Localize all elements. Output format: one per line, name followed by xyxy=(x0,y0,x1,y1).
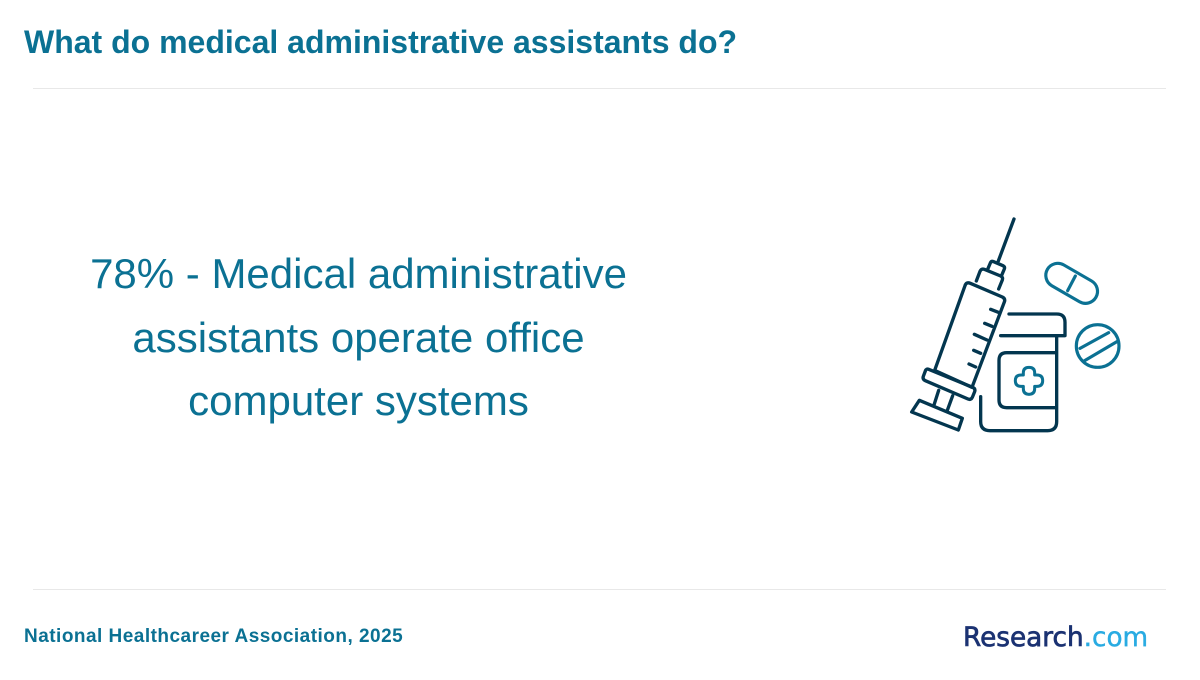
main statistic text: computer systems xyxy=(188,377,529,424)
main statistic text: assistants operate office xyxy=(132,314,585,360)
title: What do medical administrative assistants do? xyxy=(24,24,737,60)
icon: round pill xyxy=(1076,325,1119,367)
main statistic text xyxy=(90,250,627,424)
icon: capsule xyxy=(1041,259,1102,308)
logo: Research.com: Research.com xyxy=(963,623,1148,653)
main statistic text: 78% - Medical administrative xyxy=(90,250,627,297)
icon: syringe, medicine bottle and pills xyxy=(910,217,1121,432)
source note: National Healthcareer Association, 2025 xyxy=(24,626,403,647)
icon: medicine bottle xyxy=(981,314,1065,431)
icon: syringe xyxy=(912,219,1014,430)
icon: medical cross xyxy=(1015,367,1043,394)
